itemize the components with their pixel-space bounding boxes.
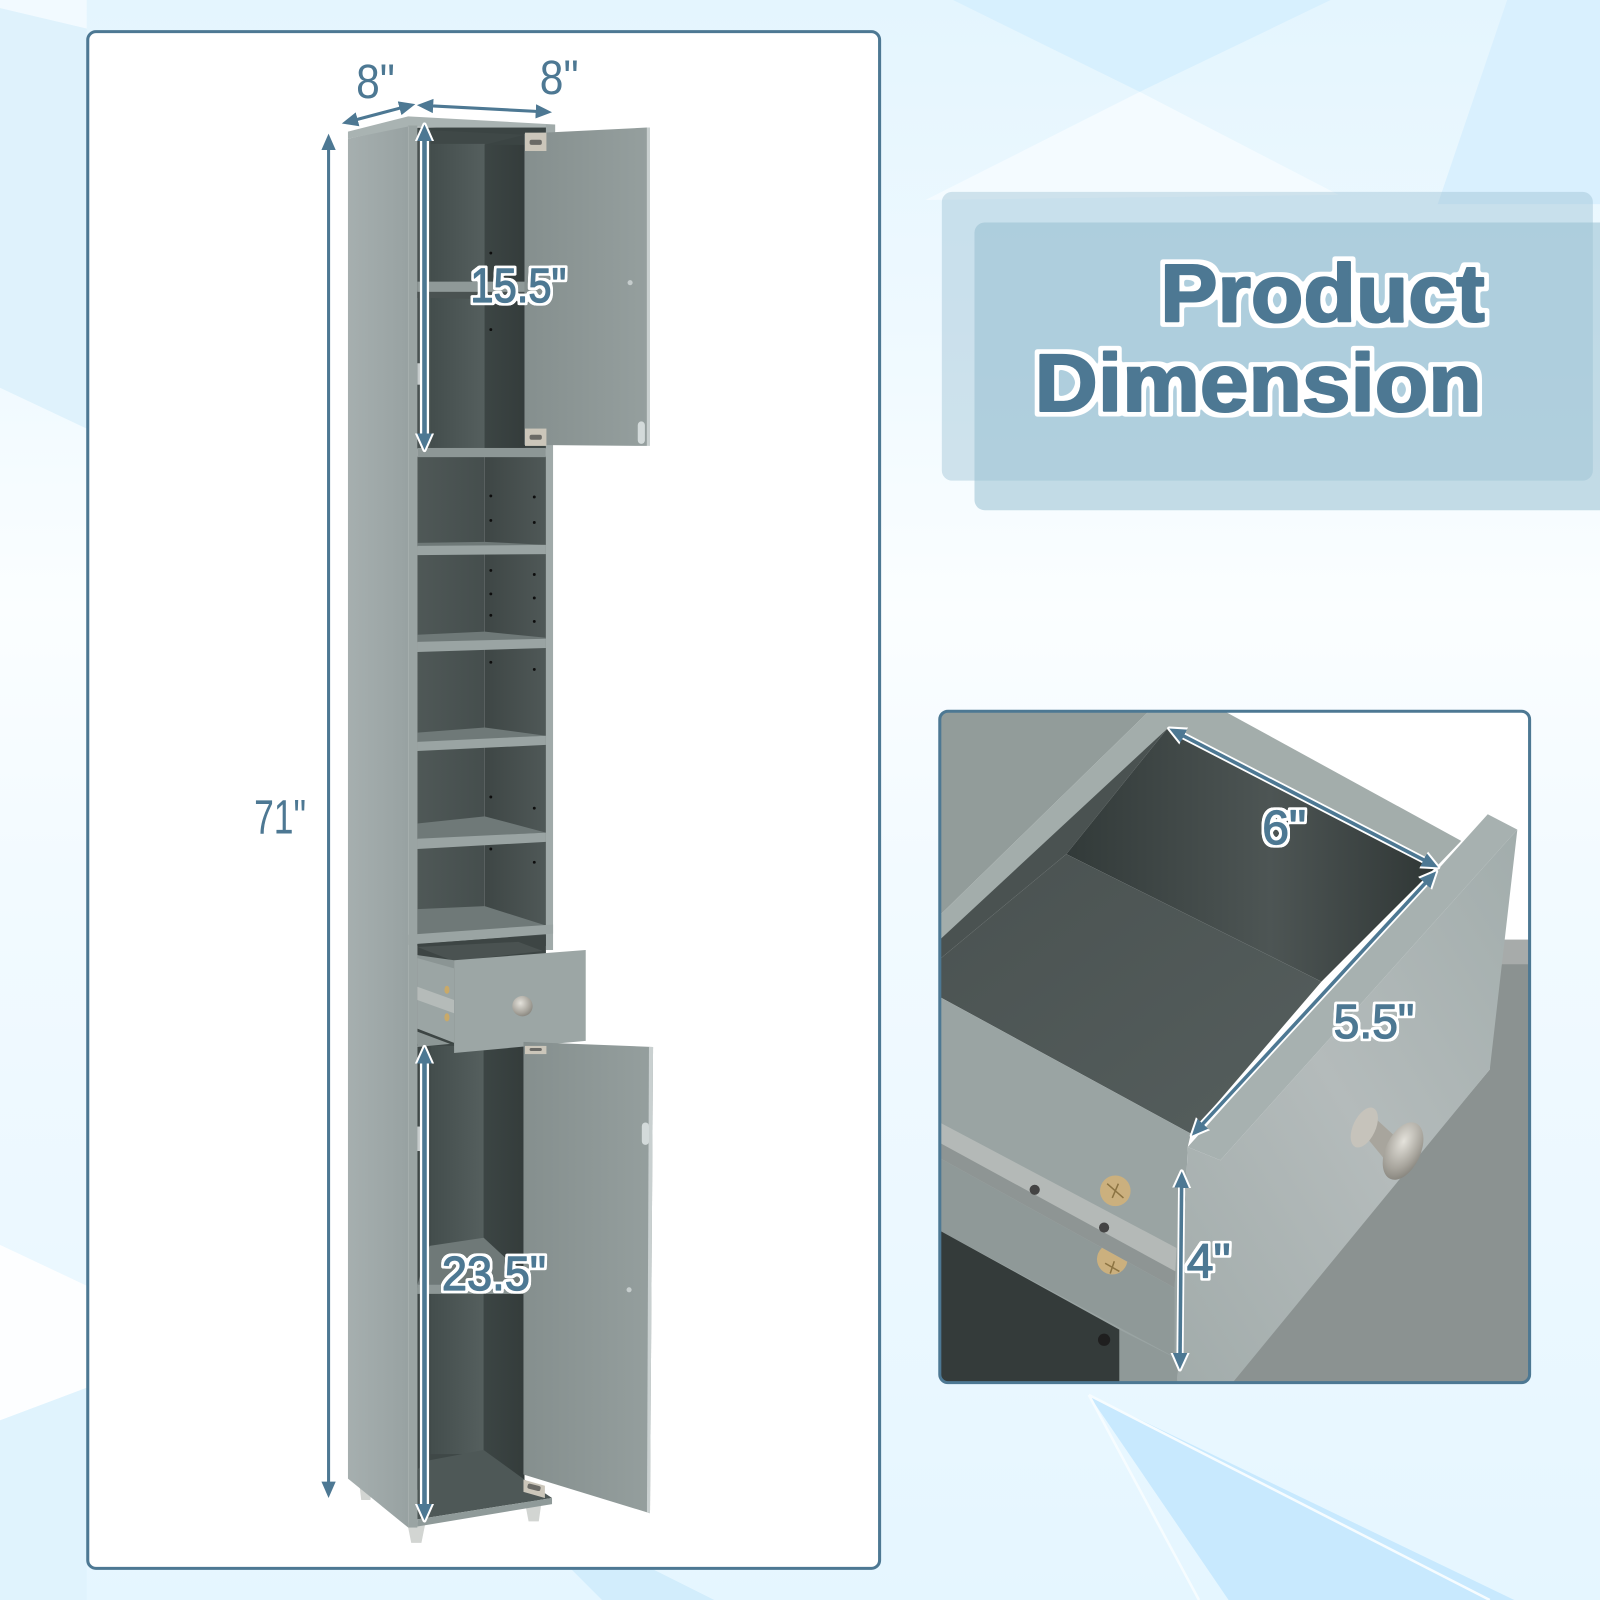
title text: Product <box>1160 248 1485 339</box>
arrow: drawer width <box>1179 734 1428 862</box>
label: drawer width 6: 6" <box>1262 802 1306 855</box>
lower door with hinges <box>523 1042 653 1513</box>
label: upper compartment 15.5: 15.5" <box>470 260 566 313</box>
icon: cabinet feet <box>358 1474 542 1543</box>
drawer inside: left wall <box>940 729 1167 959</box>
label: drawer height 4: 4" <box>1187 1236 1231 1289</box>
label: depth 8: 8" <box>356 56 395 109</box>
drawer inside: back wall <box>1066 729 1438 982</box>
label: drawer depth 5.5: 5.5" <box>1334 996 1414 1049</box>
drawer front <box>1178 830 1517 1383</box>
cabinet top seen from above <box>940 711 1149 915</box>
icon: drawer knob <box>1350 1108 1424 1180</box>
arrow: upper compartment height <box>420 136 429 439</box>
panel: full cabinet <box>88 32 880 1568</box>
drawer compartment and lower compartment <box>417 935 552 1527</box>
arrow: drawer height <box>1180 1183 1182 1358</box>
title text: Dimension <box>1035 338 1482 429</box>
floor behind drawer <box>1230 940 1530 1383</box>
screw: lower <box>1096 1248 1128 1274</box>
cabinet front frame and upper interior <box>408 124 555 1528</box>
upper door with hinges <box>524 128 650 446</box>
title panel <box>942 192 1600 510</box>
back title card <box>942 192 1593 481</box>
label: lower compartment 23.5: 23.5" <box>442 1248 546 1301</box>
label: width 8: 8" <box>540 52 579 105</box>
drawer side <box>940 997 1191 1383</box>
front title card <box>974 222 1600 510</box>
below rail <box>940 1158 1174 1357</box>
drawer front top edge <box>1188 814 1517 1160</box>
panel: drawer detail <box>940 711 1530 1383</box>
icon: drawer knob <box>512 996 533 1016</box>
screw and holes <box>1030 1176 1131 1346</box>
arrow: width <box>428 106 541 112</box>
open shelves section <box>408 252 553 1189</box>
drawer rim <box>1167 711 1461 865</box>
arrow: lower compartment height <box>420 1058 429 1509</box>
title text <box>1035 248 1485 429</box>
slide rail <box>941 1124 1176 1271</box>
arrow: total height <box>327 145 330 1487</box>
open drawer <box>417 942 586 1053</box>
cabinet top <box>348 116 555 139</box>
label: total height 71: 71" <box>254 792 306 845</box>
cabinet side panel <box>348 126 408 1528</box>
drawer inside: floor <box>940 854 1321 1134</box>
arrow: depth <box>353 107 404 121</box>
arrow: drawer depth <box>1199 880 1429 1128</box>
lower cabinet interior <box>940 1231 1119 1383</box>
